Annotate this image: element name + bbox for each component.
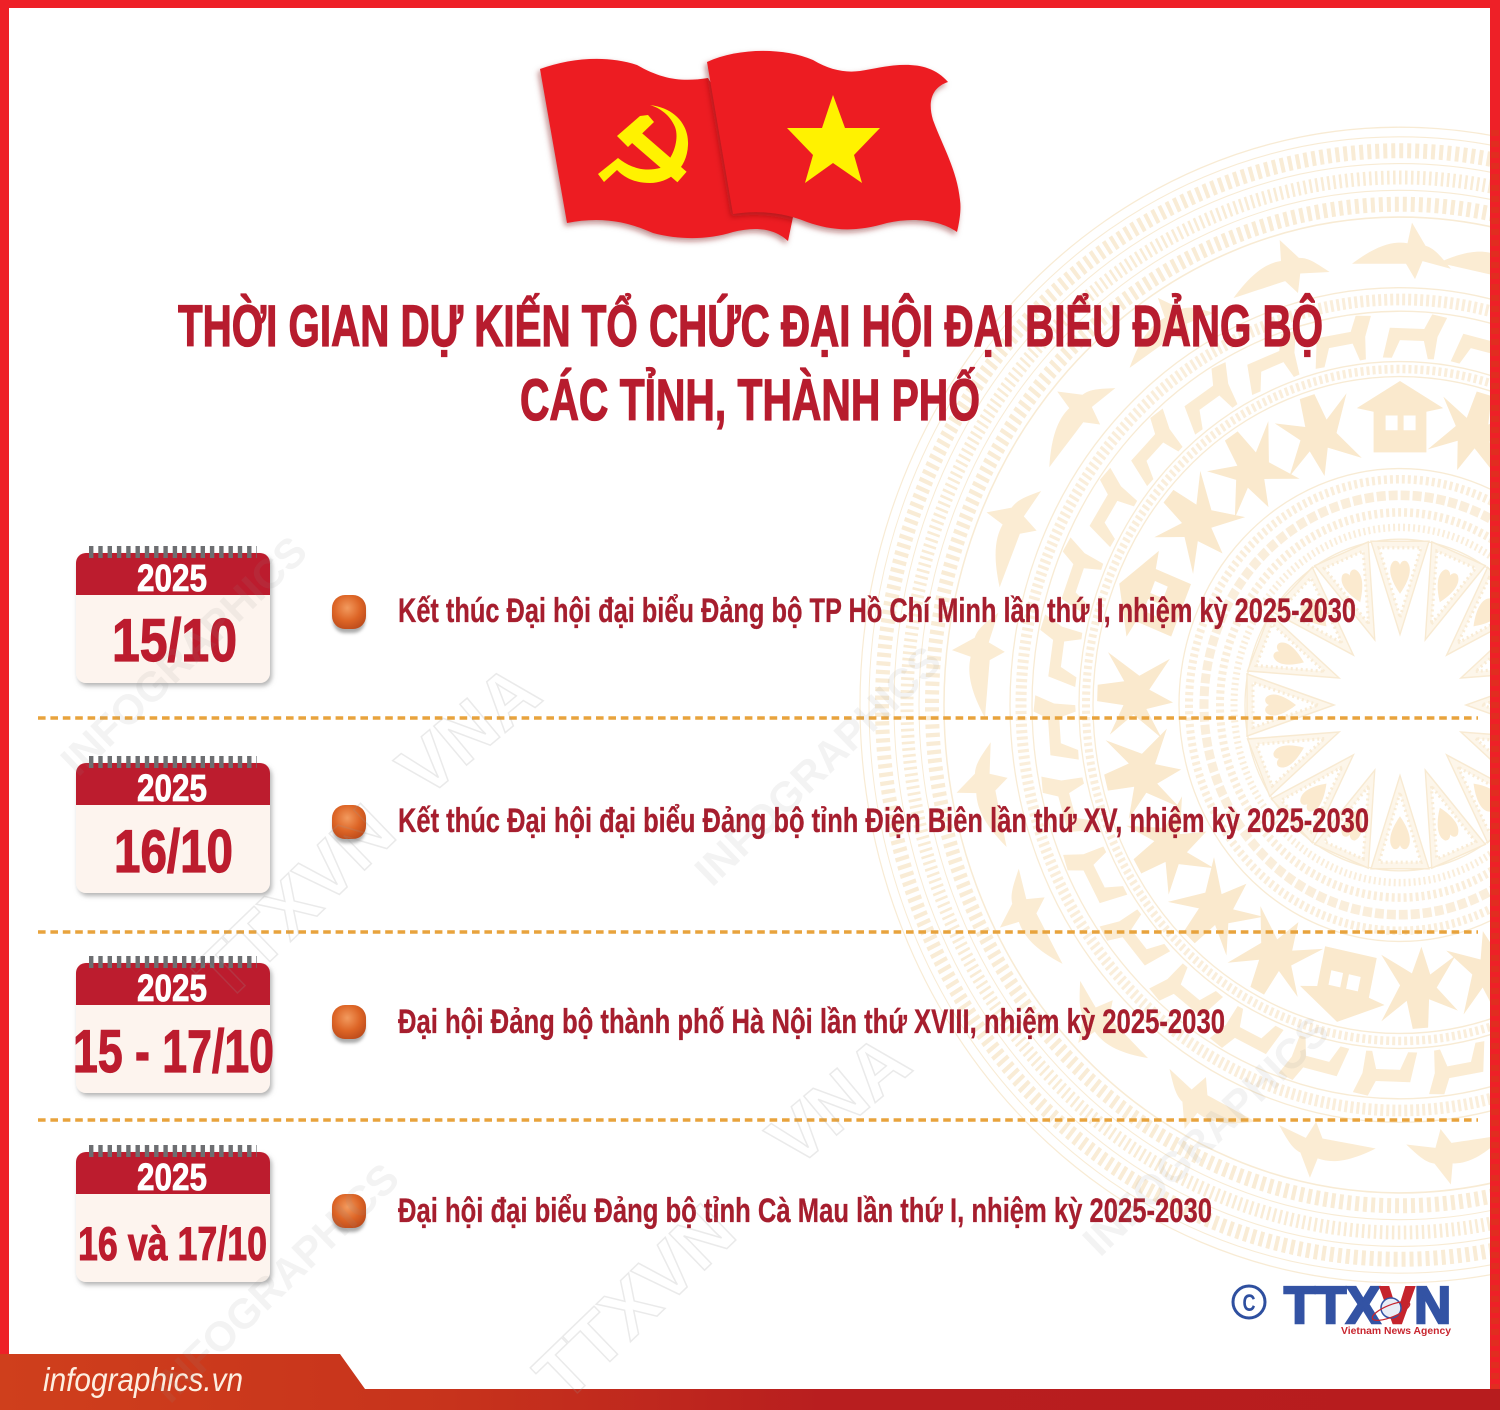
watermarks: INFOGRAPHICS xyxy=(686,637,950,894)
footer band xyxy=(0,1354,1500,1410)
watermarks xyxy=(52,527,1338,1410)
row 3: 15 - 17/10 xyxy=(73,962,1225,1093)
calendar icon 15 - 17/10: 2025 xyxy=(137,968,207,1010)
TTXVN logo xyxy=(1233,1277,1451,1337)
wordmark: TTXVN xyxy=(1284,1277,1451,1335)
calendar icon 16 và 17/10: 2025 xyxy=(137,1157,207,1199)
party flag xyxy=(540,59,793,241)
title: CÁC TỈNH, THÀNH PHỐ xyxy=(520,368,980,433)
watermarks: INFOGRAPHICS xyxy=(1074,1007,1338,1264)
bullet xyxy=(332,1194,366,1232)
watermarks: INFOGRAPHICS xyxy=(52,527,316,784)
national flag xyxy=(707,51,960,232)
row 2: 16/10 xyxy=(76,762,1369,893)
row 1: 15/10 xyxy=(76,552,1356,683)
agency name: Vietnam News Agency xyxy=(1341,1325,1451,1337)
watermarks: TTXVN xyxy=(178,788,411,1017)
zone of birds xyxy=(947,223,1500,1190)
calendar icon 16 và 17/10: 16 và 17/10 xyxy=(78,1217,267,1270)
calendar icon 15/10 xyxy=(76,552,270,683)
copyright mark: C xyxy=(1242,1290,1256,1317)
event text: Đại hội đại biểu Đảng bộ tỉnh Cà Mau lần thứ I, nhiệm kỳ 2025-2030 xyxy=(398,1192,1212,1230)
globe emblem xyxy=(1370,1298,1412,1324)
bullet xyxy=(332,595,366,633)
bullet xyxy=(332,1005,366,1043)
watermarks: VNA xyxy=(382,648,555,812)
background: bronze drum pattern xyxy=(860,127,1500,1283)
zone of figures and houses xyxy=(1096,381,1500,1032)
calendar icon 16/10: 2025 xyxy=(137,768,207,810)
calendar icon 15/10: 2025 xyxy=(137,558,207,600)
calendar icon 15 - 17/10: 15 - 17/10 xyxy=(73,1018,274,1085)
website label: infographics.vn xyxy=(43,1361,243,1398)
flags xyxy=(540,51,960,241)
row dividers xyxy=(38,718,1478,1120)
copyright mark xyxy=(1233,1286,1265,1318)
central star rays xyxy=(1247,541,1500,869)
row 4: 16 và 17/10 xyxy=(76,1151,1212,1282)
zone of deer xyxy=(1032,313,1500,1097)
calendar icon 15 - 17/10 xyxy=(73,962,274,1093)
outer rings of the drum xyxy=(860,127,1500,1283)
calendar icon 15/10: 15/10 xyxy=(112,607,237,674)
watermarks: VNA xyxy=(752,1018,925,1182)
calendar icon 16/10 xyxy=(76,762,270,893)
bullet xyxy=(332,805,366,843)
watermarks: TTXVN xyxy=(518,1188,751,1410)
title xyxy=(178,294,1323,433)
calendar icon 16 và 17/10 xyxy=(76,1151,270,1282)
watermarks: INFOGRAPHICS xyxy=(144,1154,408,1410)
event text: Đại hội Đảng bộ thành phố Hà Nội lần thứ XVIII, nhiệm kỳ 2025-2030 xyxy=(398,1003,1225,1041)
calendar icon 16/10: 16/10 xyxy=(114,818,233,885)
